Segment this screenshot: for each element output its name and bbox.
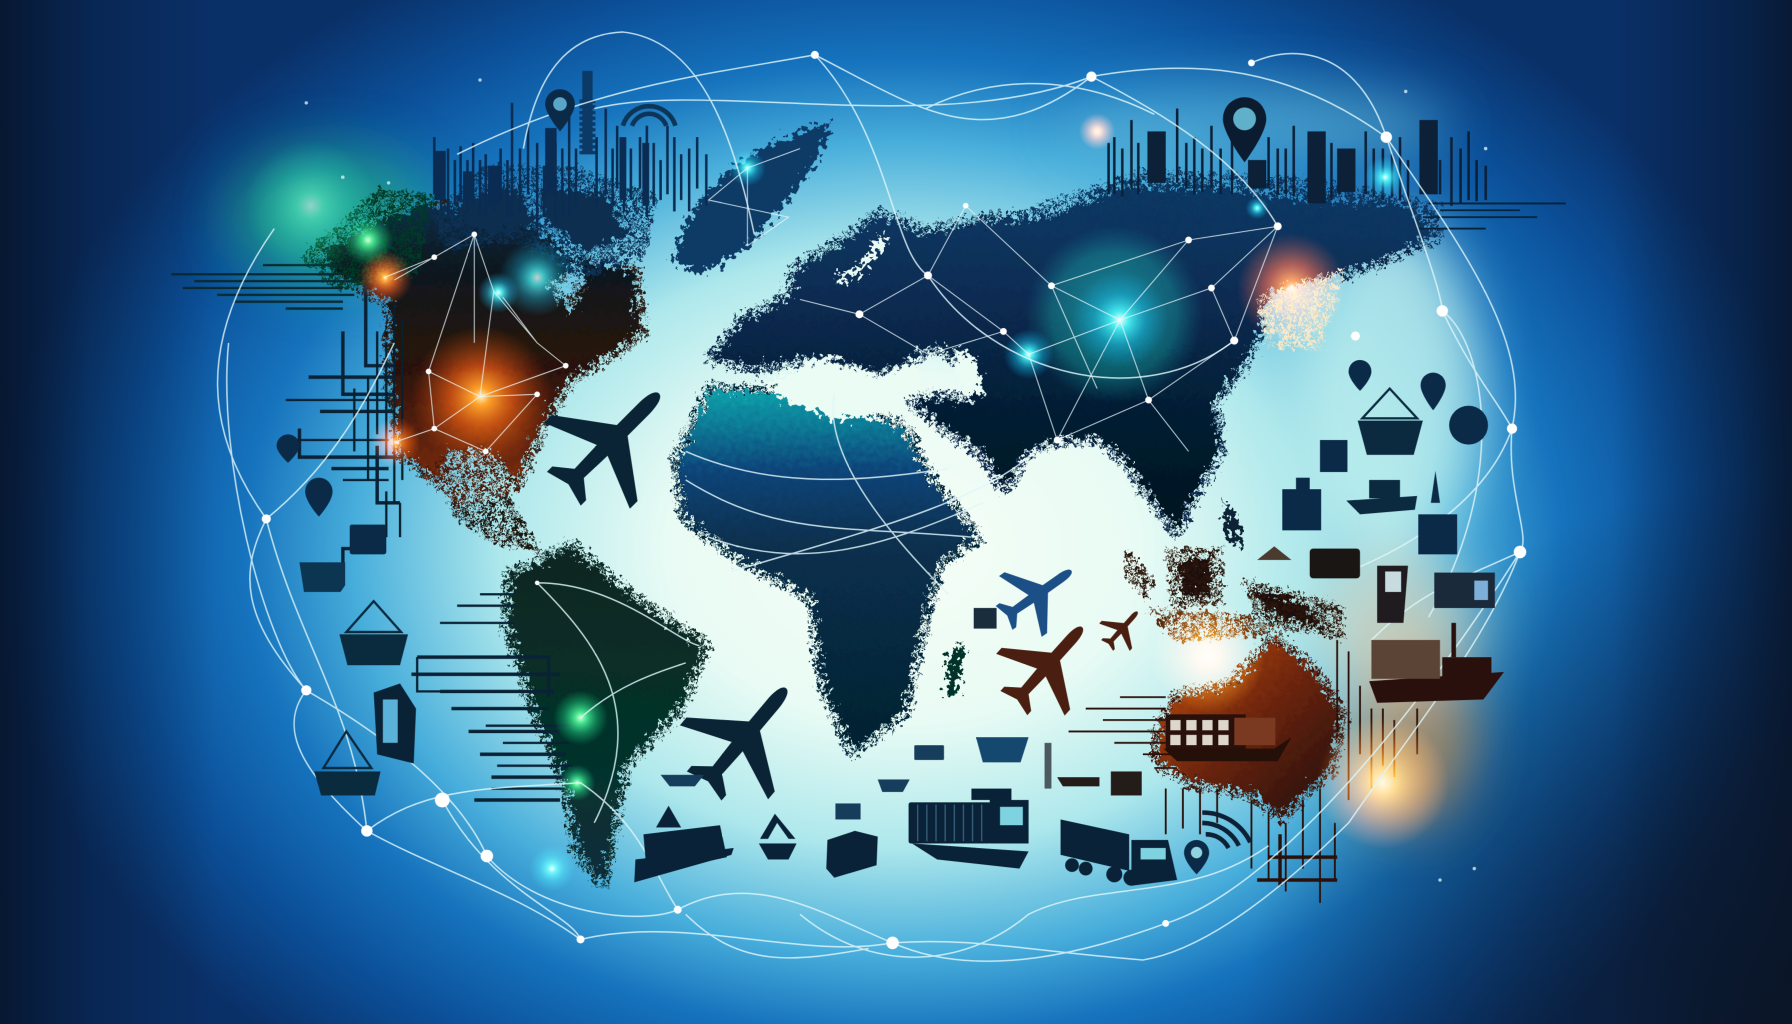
circuit lines: west (286, 286, 571, 800)
icon: cargo ship right (1369, 623, 1504, 703)
icon: basket centre (976, 737, 1029, 762)
continent: Central America (423, 440, 543, 554)
skyline: north america (434, 71, 706, 229)
network mesh (384, 149, 1278, 451)
icon: left box (350, 525, 386, 554)
icon: tower (1418, 471, 1457, 554)
continent: Africa (679, 391, 974, 749)
icon: truck (1061, 819, 1177, 886)
plane: blue (983, 540, 1093, 648)
icon: window right (1377, 566, 1408, 623)
icon: box right (1320, 440, 1347, 472)
streaks: right (1417, 203, 1566, 229)
plane: north atlantic (521, 351, 702, 532)
icon: small crane ship (759, 814, 797, 859)
icon: left boat (314, 731, 381, 795)
plane: south atlantic (660, 651, 830, 823)
icon: big cargo ship (909, 789, 1029, 869)
icon: ship over australia (1163, 714, 1291, 761)
scattered island stipple (1122, 546, 1343, 642)
world map (299, 121, 1442, 880)
icons: small shipping row (661, 546, 1291, 819)
drips: australia (1069, 640, 1417, 903)
solid arctic blotches (451, 189, 629, 251)
route arcs (218, 32, 1523, 961)
plane: small brown (1092, 598, 1153, 659)
icon: crate (826, 831, 878, 878)
white seas and peninsulas (763, 234, 983, 421)
east asia stipple (1257, 267, 1346, 350)
glows (245, 113, 1449, 891)
vertical stripes: north america interior (354, 303, 402, 537)
eurasia north speckle (1006, 169, 1442, 245)
icon: left basket ship (339, 601, 408, 665)
icon: ship bottom left (634, 806, 734, 882)
plane: brown (980, 596, 1116, 734)
small dots (305, 78, 1487, 882)
arctic islands (299, 166, 657, 291)
continent: Australia (1160, 640, 1339, 814)
icon: wifi arcs (623, 106, 1250, 848)
continent: Greenland (672, 121, 832, 274)
skyline: asia (1109, 109, 1486, 206)
continent: Eurasia (714, 189, 1434, 528)
icon: container right (1434, 573, 1495, 608)
icon: left window (374, 683, 416, 763)
continent: South America (510, 549, 703, 880)
icon: tanker (1346, 480, 1417, 514)
icon: right basket (1358, 389, 1423, 455)
soft colour haze behind map (229, 86, 1480, 829)
stippled coastline halos (326, 189, 1434, 880)
network nodes (262, 51, 1526, 949)
icons: map pins (277, 89, 1446, 874)
icon: container dark (1310, 549, 1360, 578)
continent: SE Asia islands and Madagascar (946, 497, 1326, 697)
continent: North America (326, 203, 638, 480)
icon: cargo box (1282, 478, 1321, 530)
icon: left ship (299, 562, 345, 592)
icon: globe pin (1449, 406, 1488, 445)
streaks: left (171, 265, 354, 309)
